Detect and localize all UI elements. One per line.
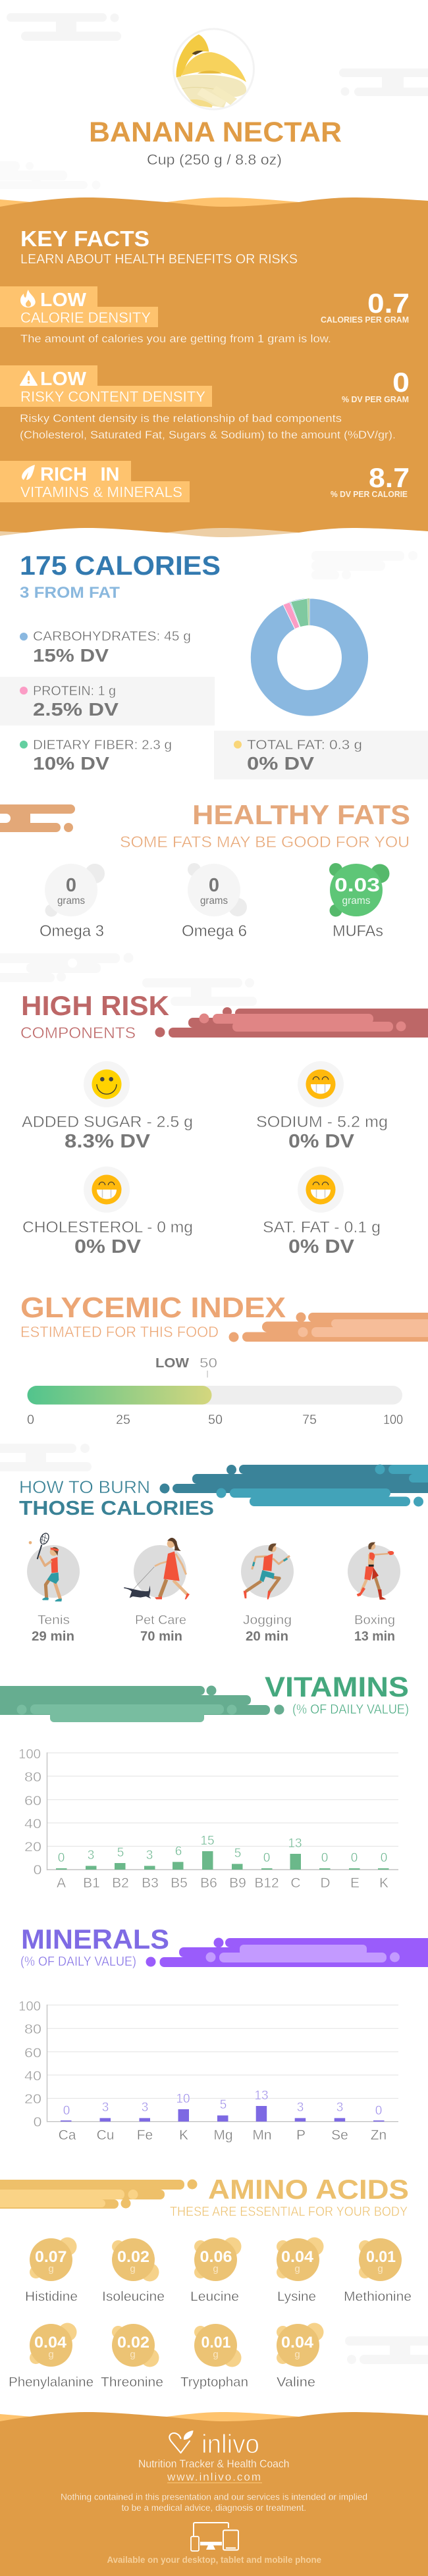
amino: leucine — [190, 2237, 241, 2304]
amino: valine: Valine — [277, 2375, 315, 2390]
bar chart: minerals: Ca — [59, 2128, 76, 2143]
gauge scale: 50 — [208, 1413, 223, 1427]
bar chart: vitamins: B2 — [112, 1876, 129, 1891]
bar chart: minerals: 3 — [102, 2101, 109, 2115]
activity: boxing: 13 min — [354, 1629, 395, 1644]
gauge scale: 100 — [383, 1413, 403, 1427]
background clouds: high risk — [0, 953, 257, 1006]
amino: lysine: g — [294, 2263, 300, 2274]
sodium — [256, 1061, 388, 1152]
icon: jogger — [244, 1544, 290, 1599]
bar chart: minerals: Zn — [371, 2128, 387, 2143]
amino: isoleucine: g — [130, 2263, 136, 2274]
bar chart: vitamins: 6 — [175, 1845, 182, 1858]
amino: methionine: Methionine — [344, 2290, 412, 2304]
decorative band: glycemic — [229, 1313, 428, 1342]
bar chart: vitamins: 0 — [33, 1863, 42, 1878]
bar chart: vitamins: E — [350, 1876, 360, 1891]
decorative band: burn — [159, 1464, 428, 1506]
activity: jogging: Jogging — [243, 1614, 292, 1627]
cholesterol: 0% DV — [74, 1236, 142, 1257]
cholesterol: CHOLESTEROL - 0 mg — [22, 1219, 193, 1236]
amino: threonine: Threonine — [101, 2375, 163, 2390]
background cloud: calories — [311, 551, 417, 579]
food image: banana in circle — [174, 29, 254, 109]
amino: phenylalanine: 0.04 — [34, 2334, 67, 2352]
legend: dietary fiber: DIETARY FIBER: 2.3 g — [33, 738, 172, 752]
heading: amino acids: AMINO ACIDS — [208, 2174, 409, 2205]
bar chart: vitamins: 5 — [117, 1846, 124, 1860]
risky content value: 0 — [392, 367, 410, 398]
bar chart: vitamins: K — [379, 1876, 388, 1891]
omega 6: grams — [200, 895, 228, 907]
amino: methionine — [344, 2238, 412, 2304]
activity: tennis: Tenis — [38, 1614, 70, 1627]
bar chart: vitamins: 3 — [146, 1849, 153, 1862]
mufas — [329, 863, 390, 940]
risky content description: Risky Content density is the relationship of bad components — [20, 413, 342, 425]
bar chart: vitamins: 0 — [263, 1851, 270, 1865]
amino: valine: 0.04 — [281, 2334, 314, 2352]
calorie density badge: CALORIE DENSITY — [20, 309, 151, 326]
heading: calories: 175 CALORIES — [20, 550, 221, 581]
bar chart: vitamins: 15 — [200, 1834, 215, 1848]
glycemic value — [155, 1356, 217, 1377]
activity: jogging — [241, 1544, 294, 1644]
donut chart — [250, 598, 368, 716]
legend: carbohydrates — [20, 629, 191, 666]
activity: tennis — [27, 1532, 80, 1644]
bar chart: vitamins: B12 — [254, 1876, 279, 1891]
bar chart: minerals: Cu — [97, 2128, 114, 2143]
bar chart: minerals: 13 — [254, 2089, 269, 2103]
footer — [0, 2412, 428, 2576]
calorie density description: The amount of calories you are getting from 1 gram is low. — [20, 333, 331, 345]
subheading: glycemic index: ESTIMATED FOR THIS FOOD — [20, 1323, 219, 1340]
omega 3: 0 — [66, 875, 76, 896]
sodium: 0% DV — [288, 1131, 355, 1152]
vitamins and minerals value: 8.7 — [369, 462, 410, 493]
bar chart: vitamins: 0 — [351, 1851, 358, 1865]
legend: total fat — [214, 731, 428, 779]
panel: amino acids — [0, 2174, 428, 2390]
bar chart: minerals: 10 — [176, 2092, 190, 2106]
omega 6 — [182, 863, 247, 940]
calorie density badge — [0, 286, 158, 327]
bar chart: minerals: 3 — [336, 2101, 343, 2115]
saturated fat — [263, 1167, 381, 1257]
panel: healthy fats — [0, 799, 410, 940]
vitamins and minerals badge — [0, 461, 190, 502]
omega 3 — [40, 864, 105, 940]
legend: carbohydrates: CARBOHYDRATES: 45 g — [33, 629, 191, 644]
activity: tennis: 29 min — [32, 1629, 74, 1644]
bar chart: vitamins: B5 — [171, 1876, 188, 1891]
bar chart: minerals: K — [179, 2128, 188, 2143]
amino: tryptophan: g — [213, 2349, 219, 2360]
gauge scale — [27, 1413, 403, 1427]
legend: total fat: TOTAL FAT: 0.3 g — [247, 738, 362, 752]
amino: lysine: Lysine — [277, 2290, 316, 2304]
amino: valine: g — [294, 2349, 300, 2360]
bar chart: vitamins: 0 — [381, 1851, 387, 1865]
website link: www.inlivo.com — [167, 2471, 261, 2483]
activity: boxing: Boxing — [354, 1614, 395, 1627]
icon: leaf — [22, 465, 35, 480]
icon: grin — [306, 1174, 336, 1205]
bar chart: vitamins: 0 — [321, 1851, 328, 1865]
panel: calories — [0, 550, 428, 779]
omega 6: Omega 6 — [182, 922, 247, 940]
bar chart: minerals: 0 — [63, 2104, 70, 2118]
bar chart: minerals — [18, 1999, 398, 2143]
amino: methionine: g — [377, 2263, 383, 2274]
bar chart: minerals: 0 — [33, 2115, 42, 2130]
decorative band: high risk — [155, 1007, 428, 1038]
logo: inlivo: inlivo — [201, 2430, 259, 2459]
activity: boxing — [348, 1542, 400, 1644]
amino: isoleucine: Isoleucine — [102, 2290, 165, 2304]
glycemic value: LOW — [155, 1356, 189, 1371]
amino: phenylalanine — [9, 2323, 94, 2390]
amino: tryptophan — [180, 2324, 248, 2390]
legend: protein — [0, 677, 215, 725]
heading: those calories: THOSE CALORIES — [19, 1496, 214, 1519]
legend: protein: PROTEIN: 1 g — [33, 684, 116, 698]
bar chart: vitamins: 20 — [24, 1840, 41, 1854]
glycemic gauge — [28, 1386, 402, 1405]
icon: tennis player — [29, 1532, 62, 1602]
amino: histidine: g — [48, 2263, 54, 2274]
icon: warning — [20, 371, 37, 385]
bar chart: minerals: 40 — [24, 2069, 41, 2084]
saturated fat: SAT. FAT - 0.1 g — [263, 1219, 381, 1236]
amino: lysine — [277, 2237, 324, 2304]
bar chart: minerals: 20 — [24, 2092, 41, 2107]
risky content value — [342, 367, 410, 404]
activity: jogging: 20 min — [246, 1629, 288, 1644]
subheading: amino acids: THESE ARE ESSENTIAL FOR YOUR BODY — [170, 2205, 408, 2219]
title: BANANA NECTAR — [89, 117, 342, 148]
risky content badge: RISKY CONTENT DENSITY — [20, 388, 205, 405]
bar chart: vitamins — [18, 1747, 398, 1891]
icon: woman walking dog — [124, 1538, 190, 1599]
subheading: minerals: (% OF DAILY VALUE) — [20, 1954, 136, 1969]
cholesterol — [22, 1167, 193, 1257]
amino: threonine — [101, 2324, 163, 2390]
icon: smile — [92, 1069, 121, 1099]
legend: dietary fiber: 10% DV — [33, 753, 109, 774]
bar chart: minerals: Mg — [213, 2128, 233, 2143]
risky content badge: LOW — [40, 369, 87, 390]
risky content value: % DV PER GRAM — [342, 394, 409, 404]
mufas: MUFAs — [333, 922, 383, 940]
bar chart: minerals: 5 — [220, 2098, 227, 2112]
amino: histidine: Histidine — [25, 2290, 78, 2304]
added sugar: 8.3% DV — [65, 1131, 151, 1152]
disclaimer: to be a medical advice, diagnosis or treatment. — [121, 2502, 306, 2513]
disclaimer: Nothing contained in this presentation and our services is intended or implied — [61, 2491, 367, 2502]
added sugar: ADDED SUGAR - 2.5 g — [22, 1113, 193, 1131]
icon: grin — [92, 1174, 121, 1205]
bar chart: minerals: P — [296, 2128, 306, 2143]
tagline: Nutrition Tracker & Health Coach — [138, 2458, 290, 2470]
amino: phenylalanine: g — [48, 2349, 54, 2360]
mufas: 0.03 — [334, 875, 380, 896]
logo: inlivo — [169, 2430, 259, 2459]
risky content description: (Cholesterol, Saturated Fat, Sugars & Sodium) to the amount (%DV/gr). — [20, 429, 396, 441]
bar chart: minerals: 0 — [375, 2104, 382, 2118]
amino: leucine: g — [213, 2263, 219, 2274]
background cloud: amino acids — [345, 2336, 428, 2364]
bar chart: minerals: 100 — [18, 1999, 41, 2014]
amino: threonine: 0.02 — [117, 2334, 149, 2352]
legend: dietary fiber — [20, 738, 172, 774]
bar chart: minerals: Se — [331, 2128, 348, 2143]
serving size: Cup (250 g / 8.8 oz) — [147, 151, 282, 168]
calorie density value: CALORIES PER GRAM — [321, 315, 409, 325]
sodium: SODIUM - 5.2 mg — [256, 1113, 388, 1131]
heading: key facts: KEY FACTS — [20, 226, 149, 251]
bar chart: minerals: Mn — [252, 2128, 272, 2143]
bar chart: vitamins: 100 — [18, 1747, 41, 1762]
bar chart: vitamins: 5 — [234, 1847, 241, 1860]
vitamins and minerals badge: IN — [100, 464, 120, 485]
bar chart: vitamins: 60 — [24, 1794, 41, 1808]
calorie density badge: LOW — [40, 290, 87, 311]
subheading: healthy fats: SOME FATS MAY BE GOOD FOR YOU — [120, 833, 410, 851]
added sugar — [22, 1061, 193, 1152]
amino: histidine: 0.07 — [35, 2248, 67, 2266]
amino: phenylalanine: Phenylalanine — [9, 2375, 94, 2390]
panel: minerals — [18, 1924, 428, 2143]
bar chart: minerals: 60 — [24, 2046, 41, 2061]
omega 3: Omega 3 — [40, 922, 104, 940]
calorie density value: 0.7 — [367, 288, 410, 319]
amino: methionine: 0.01 — [366, 2248, 396, 2266]
glycemic value: 50 — [200, 1356, 217, 1371]
bar chart: vitamins: 80 — [24, 1770, 41, 1785]
risky content badge — [0, 365, 212, 407]
icon: boxer — [357, 1542, 394, 1600]
panel: glycemic index — [20, 1292, 428, 1427]
bar chart: vitamins: 13 — [288, 1837, 302, 1851]
bar chart: vitamins: C — [290, 1876, 301, 1891]
gauge scale: 25 — [116, 1413, 130, 1427]
bar chart: vitamins: B6 — [200, 1876, 217, 1891]
activity: pet care: Pet Care — [135, 1614, 186, 1627]
heading: vitamins: VITAMINS — [265, 1671, 409, 1703]
disclaimer — [61, 2491, 367, 2513]
amino: isoleucine: 0.02 — [117, 2248, 149, 2266]
subheading: calories from fat: 3 FROM FAT — [20, 584, 120, 602]
bar chart: vitamins: B3 — [142, 1876, 159, 1891]
omega 6: 0 — [209, 875, 219, 896]
calorie density value — [321, 288, 410, 325]
heading: glycemic index: GLYCEMIC INDEX — [20, 1292, 286, 1324]
amino: leucine: 0.06 — [200, 2248, 232, 2266]
amino: histidine — [25, 2237, 78, 2304]
subheading: vitamins: (% OF DAILY VALUE) — [292, 1702, 409, 1717]
amino: lysine: 0.04 — [281, 2248, 314, 2266]
activity: pet care: 70 min — [140, 1629, 182, 1644]
panel: key facts — [0, 197, 428, 548]
mufas: grams — [342, 895, 370, 907]
decorative band: vitamins — [0, 1685, 284, 1722]
heading: how to burn: HOW TO BURN — [19, 1477, 150, 1497]
icon: devices — [191, 2523, 238, 2551]
vitamins and minerals value — [331, 462, 410, 499]
bar chart: minerals: 3 — [297, 2101, 304, 2115]
bar chart: vitamins: D — [320, 1876, 331, 1891]
decorative band: healthy fats — [0, 804, 75, 832]
risky content description — [20, 413, 396, 441]
panel: how to burn — [19, 1464, 428, 1644]
decorative band: amino acids — [0, 2179, 198, 2209]
gauge scale: 75 — [302, 1413, 317, 1427]
heading: minerals: MINERALS — [21, 1924, 169, 1955]
subheading: LEARN ABOUT HEALTH BENEFITS OR RISKS — [20, 252, 298, 267]
activity: pet care — [124, 1538, 190, 1644]
amino: leucine: Leucine — [190, 2290, 239, 2304]
availability note: Available on your desktop, tablet and mobile phone — [107, 2554, 321, 2565]
vitamins and minerals badge: VITAMINS & MINERALS — [20, 484, 182, 500]
panel: high risk components — [20, 990, 428, 1257]
amino: tryptophan: 0.01 — [201, 2334, 230, 2352]
heading: healthy fats: HEALTHY FATS — [192, 799, 410, 830]
bar chart: vitamins: 0 — [58, 1851, 65, 1865]
amino: tryptophan: Tryptophan — [180, 2375, 248, 2390]
background cloud: burn — [0, 1444, 92, 1471]
vitamins and minerals value: % DV PER CALORIE — [331, 489, 408, 499]
bar chart: vitamins: 3 — [88, 1849, 94, 1862]
gauge scale: 0 — [27, 1413, 34, 1427]
vitamins and minerals badge: RICH — [40, 464, 87, 485]
icon: grin — [306, 1069, 336, 1099]
bar chart: minerals: 80 — [24, 2022, 41, 2037]
amino: valine — [277, 2323, 324, 2390]
amino: threonine: g — [130, 2349, 136, 2360]
bar chart: vitamins: B9 — [229, 1876, 246, 1891]
bar chart: minerals: Fe — [137, 2128, 153, 2143]
bar chart: vitamins: 40 — [24, 1817, 41, 1831]
bar chart: vitamins: B1 — [83, 1876, 100, 1891]
legend: protein: 2.5% DV — [33, 699, 119, 720]
bar chart: minerals: 3 — [142, 2101, 148, 2115]
amino: isoleucine — [102, 2238, 165, 2304]
icon: flame — [20, 290, 36, 307]
omega 3: grams — [57, 895, 85, 907]
background clouds: header — [0, 13, 428, 190]
bar chart: vitamins: A — [57, 1876, 66, 1891]
decorative band: minerals — [146, 1938, 428, 1967]
panel: vitamins — [0, 1671, 409, 1891]
subheading: components: COMPONENTS — [20, 1024, 136, 1042]
legend: total fat: 0% DV — [247, 753, 314, 774]
saturated fat: 0% DV — [288, 1236, 355, 1257]
legend: carbohydrates: 15% DV — [33, 645, 109, 666]
heading: high risk: HIGH RISK — [21, 990, 169, 1021]
